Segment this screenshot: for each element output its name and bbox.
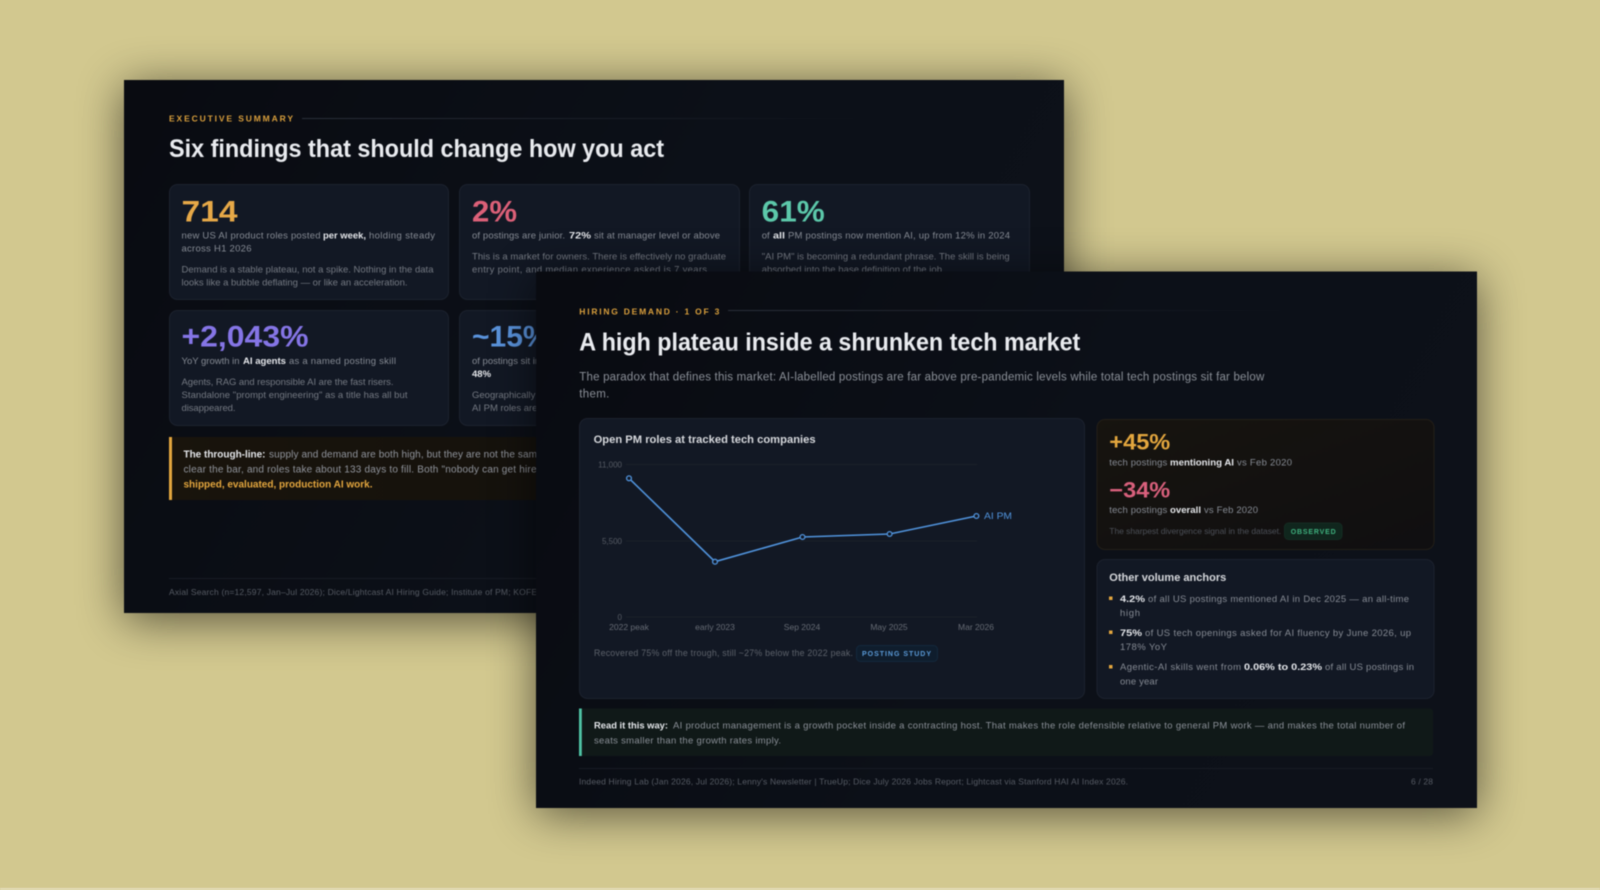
subtitle: The paradox that defines this market: AI-labelled postings are far above pre-pandemic levels while total tech postings sit far below bbox=[579, 372, 1265, 384]
finding card: 2%: entry point, and median experience asked is 7 years. bbox=[472, 264, 710, 276]
panel: other volume anchors bbox=[1097, 560, 1434, 698]
finding card: +2,043%: YoY growth in bbox=[182, 356, 240, 367]
finding card: +2,043%: Agents, RAG and responsible AI are the fast risers. bbox=[182, 377, 394, 388]
slide: executive summary bbox=[124, 80, 1064, 620]
finding card: ~15%: AI PM roles are no longer Bay Area only. bbox=[472, 403, 643, 414]
finding card: 61%: 61% bbox=[762, 196, 825, 229]
bullet list: of US tech openings asked for AI fluency by June 2026, up bbox=[1145, 628, 1411, 639]
finding card: +2,043%: AI agents bbox=[243, 356, 286, 367]
finding card: 2%: This is a market for owners. There is effectively no graduate bbox=[472, 252, 726, 262]
finding card: 2% bbox=[460, 184, 740, 300]
source footer: Axial Search (n=12,597, Jan–Jul 2026); Dice/Lightcast AI Hiring Guide; Institute of PM; KOFE bbox=[169, 587, 537, 597]
callout: the through-line bbox=[169, 437, 1029, 500]
slide: hiring demand bbox=[536, 272, 1477, 814]
callout: the through-line: supply and demand are both high, but they are not the sam bbox=[269, 450, 537, 460]
stat: +45%: tech postings bbox=[1109, 458, 1168, 468]
finding card: ~15%: 48% bbox=[472, 369, 492, 380]
finding card: 61% bbox=[750, 184, 1030, 300]
finding card: 714 bbox=[170, 184, 448, 300]
bullet list: 75% bbox=[1120, 628, 1143, 639]
stat: −34% bbox=[1109, 478, 1258, 516]
finding card: 61%: of bbox=[762, 230, 770, 242]
badge: observed bbox=[1284, 523, 1342, 540]
bullet list: of all US postings mentioned AI in Dec 2025 — an all-time bbox=[1148, 594, 1409, 605]
callout: read it this way: AI product management is a growth pocket inside a contracting host. That makes the role defensible relative to general PM work — and makes the total number of bbox=[673, 720, 1405, 732]
finding card: 61%: absorbed into the base definition of the job. bbox=[762, 264, 945, 276]
finding card: 2%: of postings are junior. bbox=[472, 230, 565, 242]
stat: −34%: −34% bbox=[1109, 478, 1170, 502]
bullet list: of all US postings in bbox=[1325, 662, 1414, 673]
eyebrow: hiring demand: HIRING DEMAND · 1 OF 3 bbox=[579, 306, 720, 316]
panel: divergence stats bbox=[1097, 420, 1434, 550]
line chart: 11,000 bbox=[598, 460, 623, 470]
subtitle: them. bbox=[579, 388, 609, 400]
badge: posting study: POSTING STUDY bbox=[862, 651, 931, 658]
finding card: 714: holding steady bbox=[369, 230, 435, 242]
stat: +45%: vs Feb 2020 bbox=[1237, 458, 1292, 468]
eyebrow: executive summary: EXECUTIVE SUMMARY bbox=[169, 114, 293, 124]
finding card: ~15%: of postings sit in the Bay Area, down from bbox=[472, 356, 647, 367]
line chart: 2022 peak bbox=[609, 622, 650, 632]
subtitle bbox=[579, 372, 1265, 400]
stat: +45% bbox=[1109, 430, 1292, 468]
stat: −34%: overall bbox=[1170, 505, 1201, 516]
finding card: +2,043%: disappeared. bbox=[182, 403, 236, 414]
heading: six findings: Six findings that should change how you act bbox=[169, 135, 665, 163]
callout: read it this way bbox=[579, 708, 1433, 756]
finding card: ~15% bbox=[460, 310, 740, 426]
line chart: May 2025 bbox=[870, 622, 908, 632]
finding card: 714: 714 bbox=[182, 196, 238, 229]
finding card: 714: per week, bbox=[323, 230, 366, 242]
line chart: Mar 2026 bbox=[958, 622, 994, 632]
finding card: 61%: "AI PM" is becoming a redundant phrase. The skill is being bbox=[762, 252, 1010, 262]
bullet list: 0.06% to 0.23% bbox=[1244, 662, 1323, 673]
stat: +45%: +45% bbox=[1109, 430, 1170, 454]
callout: the through-line: The through-line: bbox=[184, 450, 266, 460]
stat: +45%: mentioning AI bbox=[1170, 458, 1234, 468]
finding card: 2%: 2% bbox=[472, 196, 517, 229]
callout: read it this way: seats smaller than the growth rates imply. bbox=[594, 736, 781, 746]
finding card: +2,043%: Standalone "prompt engineering" as a title has all but bbox=[182, 390, 408, 401]
bullet list: 178% YoY bbox=[1120, 642, 1168, 653]
source footer and page number: 6 / 28 bbox=[1411, 776, 1433, 786]
bullet list: 4.2% bbox=[1120, 594, 1146, 605]
finding card: +2,043%: as a named posting skill bbox=[289, 356, 396, 367]
line chart: early 2023 bbox=[695, 622, 735, 632]
finding card: 714: across H1 2026 bbox=[182, 244, 252, 254]
source footer and page number: Indeed Hiring Lab (Jan 2026, Jul 2026); Lenny's Newsletter | TrueUp; Dice July 2026 Jobs Report; Lightcast via Stanford HAI AI Index 2026. bbox=[579, 776, 1128, 786]
badge: posting study bbox=[856, 646, 938, 662]
line chart: AI PM bbox=[984, 511, 1012, 521]
source footer and page number bbox=[579, 768, 1433, 786]
finding card: 714: new US AI product roles posted bbox=[182, 230, 320, 242]
chart note: Recovered 75% off the trough, still ~27% below the 2022 peak. bbox=[594, 648, 853, 658]
finding card: ~15%: ~15% bbox=[472, 321, 550, 354]
heading: high plateau: A high plateau inside a shrunken tech market bbox=[579, 329, 1081, 357]
finding card: ~15%: Geographically the market is spreading out. bbox=[472, 390, 655, 401]
bullet list: Agentic-AI skills went from bbox=[1120, 662, 1241, 673]
panel heading: Other volume anchors bbox=[1109, 572, 1226, 584]
bullet list bbox=[1109, 594, 1414, 687]
bullet list: one year bbox=[1120, 676, 1158, 687]
finding card: +2,043% bbox=[170, 310, 448, 426]
line chart: Sep 2024 bbox=[784, 622, 820, 632]
callout: the through-line: clear the bar, and roles take about 133 days to fill. Both "nobody can get hire bbox=[184, 464, 537, 476]
divergence note: The sharpest divergence signal in the dataset. bbox=[1109, 526, 1281, 536]
finding card: 61%: PM postings now mention AI, up from 12% in 2024 bbox=[788, 230, 1010, 242]
bullet list: high bbox=[1120, 608, 1140, 619]
chart title: Open PM roles at tracked tech companies bbox=[594, 434, 816, 446]
line chart: 0 bbox=[618, 613, 623, 622]
callout: read it this way: Read it this way: bbox=[594, 720, 668, 732]
stat: −34%: tech postings bbox=[1109, 505, 1168, 516]
stat: −34%: vs Feb 2020 bbox=[1204, 505, 1258, 516]
finding card: 2%: 72% bbox=[569, 230, 592, 242]
finding card: 61%: all bbox=[773, 230, 785, 242]
callout: the through-line: shipped, evaluated, production AI work. bbox=[184, 480, 373, 490]
finding card: 714: looks like a bubble deflating — or like an acceleration. bbox=[182, 278, 408, 288]
line chart bbox=[598, 460, 1012, 632]
finding card: 714: Demand is a stable plateau, not a spike. Nothing in the data bbox=[182, 264, 434, 276]
finding card: 2%: sit at manager level or above bbox=[594, 230, 720, 242]
badge: observed: OBSERVED bbox=[1291, 529, 1336, 536]
finding card: +2,043%: +2,043% bbox=[182, 321, 308, 354]
panel: open PM roles chart bbox=[580, 418, 1084, 698]
line chart: 5,500 bbox=[602, 537, 623, 546]
